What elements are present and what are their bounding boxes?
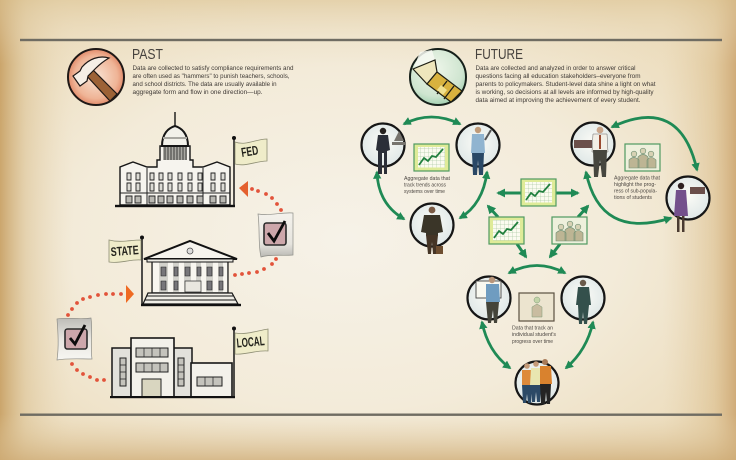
text block: past description: are often used as "hammers" to punish teachers, schools, [132, 73, 290, 80]
text block: sub-population caption: Aggregate data that [614, 176, 661, 182]
arrow: bottom arc [586, 172, 671, 223]
text block: future description: is working, so decisions at all levels are informed by high-quality [476, 89, 654, 96]
text block: past description: and school districts. The data are usually available in [132, 81, 277, 88]
arrow: dotted from state to card [233, 257, 278, 277]
text block: trends caption: systems over time [404, 189, 445, 195]
arrow: chart up left [488, 206, 498, 217]
text block: trends caption: track trends across [404, 182, 446, 188]
cycle: aggregate trends [362, 117, 500, 254]
text block: individual caption: Data that track an [512, 326, 553, 332]
state capitol building [141, 241, 241, 306]
flag: FED [232, 136, 267, 207]
heading: PAST [132, 47, 163, 63]
arrow: dotted to state [66, 285, 134, 317]
text block: individual caption [512, 326, 556, 345]
icon: student group [625, 144, 660, 171]
icon: checkbox card lower [57, 318, 92, 360]
text block: past description [132, 65, 294, 96]
arrow: top [509, 266, 565, 273]
person: businesswoman [666, 176, 710, 232]
text block: trends caption [404, 176, 451, 195]
flag: STATE [109, 236, 144, 305]
text block: sub-population caption [614, 176, 661, 201]
chart: hub lower left [489, 217, 524, 244]
text block: individual caption: progress over time [512, 339, 553, 345]
top rule [20, 39, 722, 41]
person: administrator [410, 204, 454, 254]
text block: future description: questions facing all education stakeholders–everyone from [476, 73, 640, 80]
icon: hammer [68, 49, 124, 105]
text block: future description: data aimed at improving the achievement of every student. [476, 97, 641, 104]
arrow: right [566, 322, 593, 368]
text block: past description: Data are collected to satisfy compliance requirements and [132, 65, 294, 72]
arrow: left [482, 322, 510, 368]
panel heading: past [132, 47, 294, 96]
chart: hub top [521, 179, 556, 206]
arrow: right [460, 172, 487, 218]
text block: past description: aggregate form and flow in one direction—up. [132, 89, 263, 96]
arrow: left [377, 172, 404, 219]
heading: FUTURE [475, 47, 523, 63]
text block: future description: parents to policymakers. Student-level data shine a light on what [476, 81, 656, 88]
flag: LOCAL [232, 326, 268, 397]
cycle: sub-populations [572, 117, 710, 232]
people: students [516, 359, 558, 404]
text block: trends caption: Aggregate data that [404, 176, 451, 182]
icon: checkbox card upper [258, 213, 293, 257]
arrow: dotted to federal [239, 181, 283, 212]
text block: future description [476, 65, 656, 104]
arrow: top arc [612, 117, 697, 170]
federal capitol building [115, 112, 235, 207]
text block: individual caption: individual student's [512, 332, 556, 338]
person: teacher [456, 124, 500, 175]
icon: hub student group [552, 217, 587, 244]
arrow: dotted from local to card [70, 362, 106, 382]
bottom rule [20, 414, 722, 416]
person: parent [562, 276, 604, 324]
person: policymaker [362, 124, 406, 174]
text block: sub-population caption: ress of sub-popula- [614, 188, 657, 194]
text block: sub-population caption: tions of students [614, 195, 652, 201]
cycle: individual students [468, 266, 604, 404]
central data hub [488, 179, 588, 257]
flag: STATE: STATE [110, 243, 139, 259]
person: teacher at board [468, 276, 510, 323]
arrow: chart down right [517, 244, 526, 257]
icon: flashlight [410, 49, 466, 105]
flag: LOCAL: LOCAL [236, 333, 265, 350]
person: businessman [572, 122, 614, 177]
chart: trends [414, 144, 449, 171]
text block: sub-population caption: highlight the prog- [614, 182, 656, 188]
local school building [110, 338, 235, 398]
arrow: group up right [578, 206, 588, 217]
icon: single student [519, 293, 554, 321]
arrow: group down left [550, 244, 560, 257]
text block: future description: Data are collected and analyzed in order to answer critical [476, 65, 636, 72]
arrow: right of chart [556, 192, 578, 194]
arrow: top [404, 117, 460, 124]
panel heading: future [475, 47, 656, 104]
arrow: left of chart [498, 192, 521, 194]
flag: FED: FED [240, 142, 259, 160]
